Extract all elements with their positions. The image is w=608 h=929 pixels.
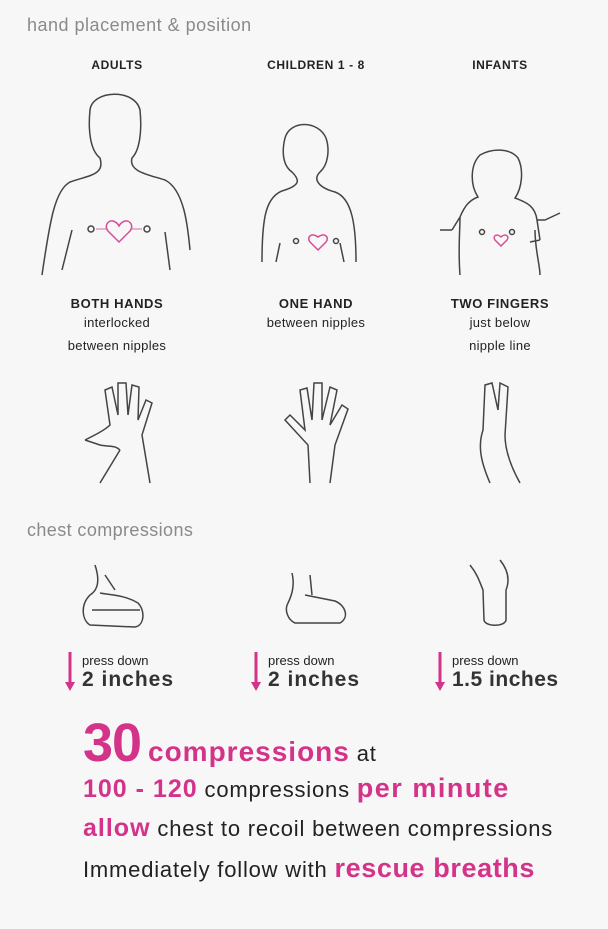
text: adults: BOTH HANDS bbox=[71, 296, 163, 311]
text: adults: interlocked bbox=[84, 315, 150, 330]
icon: child compression bbox=[286, 573, 345, 623]
icon: interlocked hands bbox=[85, 383, 152, 483]
press down: infants: 1.5 inches bbox=[452, 668, 559, 691]
summary text bbox=[83, 713, 553, 883]
title: chest compressions: chest compressions bbox=[27, 520, 193, 540]
heading: adults: ADULTS bbox=[91, 58, 143, 72]
text: adults: between nipples bbox=[68, 338, 166, 353]
summary text: allow chest to recoil between compressions bbox=[83, 814, 553, 842]
icon: adult compression bbox=[83, 565, 143, 627]
press down: children bbox=[251, 652, 360, 691]
hand icons bbox=[84, 382, 521, 484]
press down: adults bbox=[65, 652, 174, 691]
summary text: 30 compressions at bbox=[83, 713, 377, 773]
title: hand placement: hand placement & position bbox=[27, 15, 252, 35]
figure: infant bbox=[440, 150, 560, 275]
text: children: between nipples bbox=[267, 315, 365, 330]
press down: children: 2 inches bbox=[268, 668, 360, 691]
text: adults bbox=[68, 296, 166, 353]
icon: two fingers bbox=[480, 383, 520, 483]
text: infants: nipple line bbox=[469, 338, 531, 353]
body figures bbox=[41, 94, 560, 276]
press down: infants bbox=[435, 652, 559, 691]
heading: children: CHILDREN 1 - 8 bbox=[267, 58, 365, 72]
text: children bbox=[267, 296, 365, 330]
figure: adult bbox=[42, 94, 190, 275]
summary text: Immediately follow with rescue breaths bbox=[83, 853, 535, 883]
press down: adults: 2 inches bbox=[82, 668, 174, 691]
text: children: ONE HAND bbox=[279, 296, 353, 311]
text: infants: just below bbox=[470, 315, 530, 330]
arrow bbox=[65, 652, 75, 691]
summary text: 100 - 120 compressions per minute bbox=[83, 773, 510, 803]
press down: infants: press down bbox=[452, 653, 518, 668]
text: infants bbox=[451, 296, 549, 353]
text: infants: TWO FINGERS bbox=[451, 296, 549, 311]
compression icons bbox=[82, 560, 509, 628]
icon: infant compression bbox=[470, 560, 508, 625]
icon: one hand bbox=[285, 383, 348, 483]
press down: adults: press down bbox=[82, 653, 148, 668]
heading: infants: INFANTS bbox=[472, 58, 528, 72]
figure: child bbox=[262, 124, 356, 262]
press down: children: press down bbox=[268, 653, 334, 668]
